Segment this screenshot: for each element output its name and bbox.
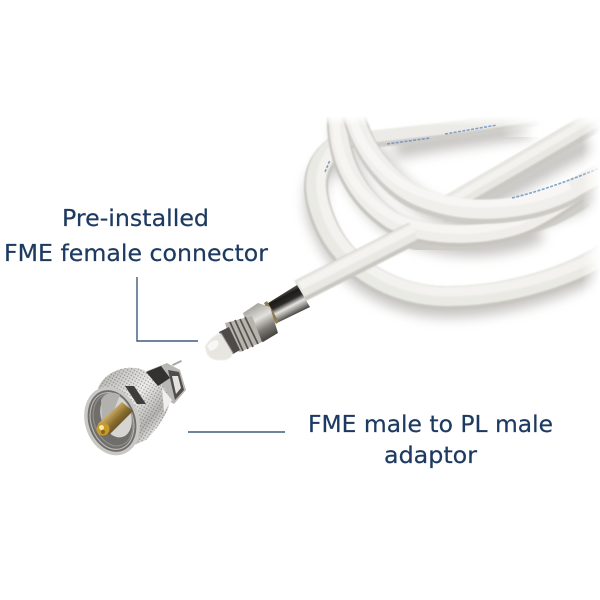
leader line: adaptor (188, 431, 285, 433)
top strand with printed marking (350, 114, 540, 142)
pin tip (96, 422, 110, 436)
tip contact (172, 360, 182, 366)
collar (219, 327, 240, 354)
gold pin (98, 402, 133, 435)
small rear barrel (147, 363, 186, 404)
white insulator tip (205, 333, 233, 360)
label: pre-installed FME female connector (4, 204, 268, 267)
inner cavity (95, 390, 137, 442)
lower shadowed strand beneath the loops (405, 236, 480, 247)
FME male to PL male adaptor (76, 360, 186, 463)
inner middle loop (336, 112, 578, 236)
front ring (76, 379, 148, 463)
label: FME male to PL male adaptor (308, 410, 553, 469)
cable shadows (315, 125, 600, 308)
printed cable marking (325, 125, 600, 198)
hex nut (243, 303, 278, 342)
label: FME male to PL male adaptor: FME male to PL male (308, 410, 553, 438)
front cable leading to connector (300, 228, 414, 291)
threaded body (225, 316, 262, 352)
right end of the middle strand (500, 197, 585, 230)
label: FME male to PL male adaptor: adaptor (384, 441, 477, 469)
dark notches (146, 366, 170, 386)
far main cable behind the loops (440, 113, 600, 212)
FME female connector (205, 285, 310, 360)
brass ring (264, 301, 279, 324)
label: pre-installed FME female connector: Pre-installed (62, 204, 209, 232)
outer bottom loop (316, 146, 600, 298)
leader line: female connector (137, 277, 198, 341)
soft fades at top and right edge (300, 100, 600, 116)
front upper loop (351, 112, 600, 212)
label: pre-installed FME female connector: FME female connector (4, 239, 268, 267)
top strand fade (500, 105, 542, 137)
crimp sleeve (265, 285, 310, 323)
coiled white coaxial cable (300, 100, 600, 308)
knurled shell (98, 368, 170, 452)
